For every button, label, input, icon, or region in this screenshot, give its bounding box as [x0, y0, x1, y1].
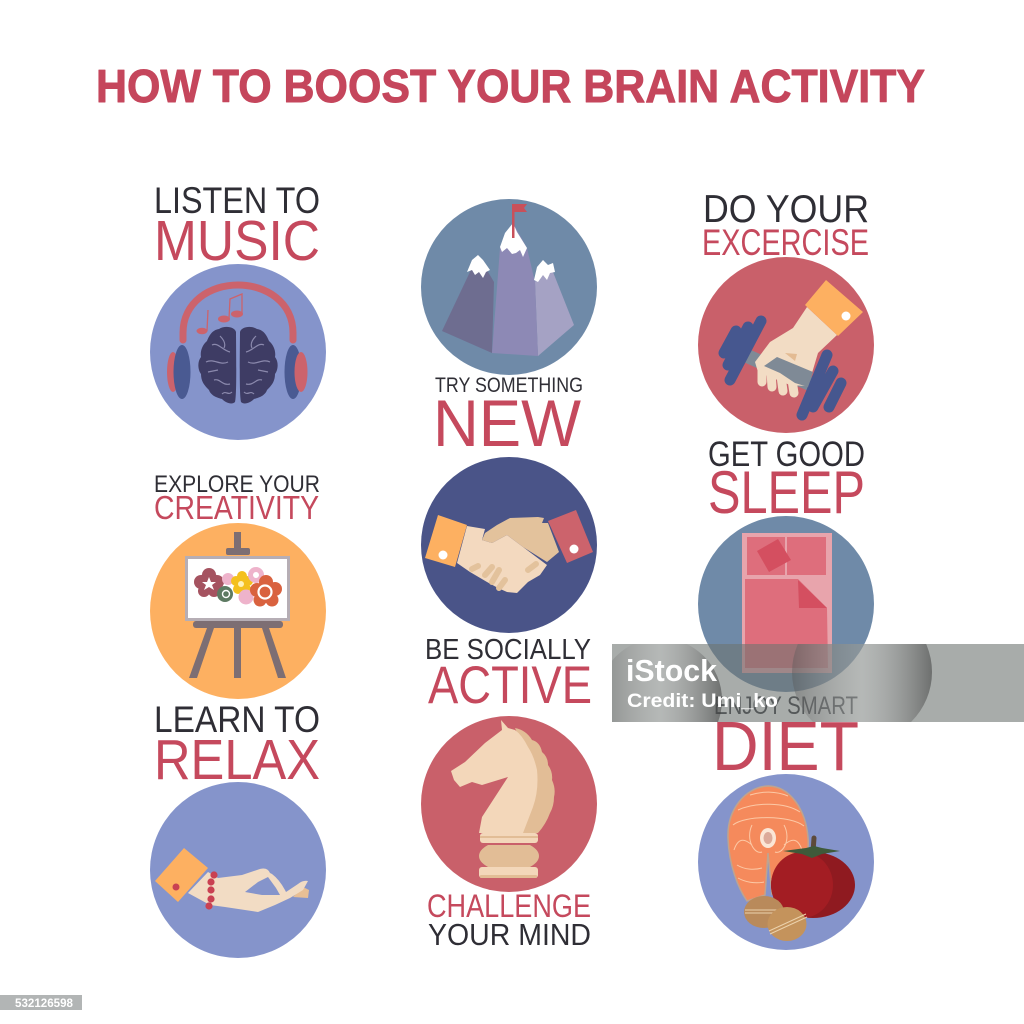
heading: try something new: TRY SOMETHING: [435, 374, 583, 397]
heading: be socially active: BE SOCIALLY: [425, 634, 591, 666]
panel: get good sleep: [698, 435, 874, 692]
heading: explore your creativity: CREATIVITY: [154, 489, 319, 526]
heading: be socially active: [425, 634, 592, 715]
heading: challenge your mind: [427, 888, 591, 952]
heading: learn to relax: LEARN TO: [154, 699, 320, 740]
icon: bed: [698, 516, 874, 692]
heading: challenge your mind: CHALLENGE: [427, 888, 591, 924]
heading: explore your creativity: [154, 471, 320, 526]
icon: headphones and brain: [150, 264, 326, 440]
panel: challenge your mind: [421, 716, 597, 952]
heading: explore your creativity: EXPLORE YOUR: [154, 471, 320, 498]
panel: learn to relax: [150, 699, 326, 958]
heading: get good sleep: [708, 435, 865, 526]
heading: try something new: NEW: [433, 386, 582, 460]
panel: be socially active: [421, 457, 597, 715]
watermark: iStock credit: [612, 644, 1024, 722]
heading: do your excercise: [702, 188, 869, 263]
watermark: iStock credit: Credit: Umi_ko: [627, 691, 778, 712]
heading: do your excercise: EXCERCISE: [702, 222, 869, 263]
image id tag: [0, 995, 82, 1010]
heading: challenge your mind: YOUR MIND: [428, 917, 591, 952]
panel: listen to music: [150, 180, 326, 440]
heading: learn to relax: RELAX: [154, 728, 320, 792]
heading: do your excercise: DO YOUR: [703, 188, 869, 231]
heading: listen to music: [154, 180, 320, 273]
icon: mountains with flag: [421, 199, 597, 375]
heading: listen to music: MUSIC: [154, 209, 320, 273]
icon: chess knight: [421, 716, 597, 892]
heading: enjoy smart diet: DIET: [712, 707, 859, 785]
icon: hand lifting dumbbell: [698, 257, 874, 433]
image id tag: 532126598: [15, 996, 73, 1010]
icon: salmon tomato walnuts: [698, 774, 874, 950]
heading: listen to music: LISTEN TO: [154, 180, 320, 221]
watermark: iStock credit: iStock: [626, 653, 718, 688]
heading: learn to relax: [154, 699, 320, 792]
heading: get good sleep: GET GOOD: [708, 435, 865, 474]
heading: be socially active: ACTIVE: [428, 656, 592, 715]
panel: try something new: [421, 199, 597, 460]
icon: meditating hand: [150, 782, 326, 958]
panel: enjoy smart diet: [698, 692, 874, 950]
panel: explore your creativity: [150, 471, 326, 699]
heading: get good sleep: SLEEP: [708, 459, 865, 526]
panel: do your excercise: [698, 188, 874, 433]
heading: enjoy smart diet: ENJOY SMART: [714, 692, 858, 720]
title: HOW TO BOOST YOUR BRAIN ACTIVITY: [96, 60, 925, 112]
icon: easel with painting: [150, 523, 326, 699]
icon: handshake: [421, 457, 597, 633]
